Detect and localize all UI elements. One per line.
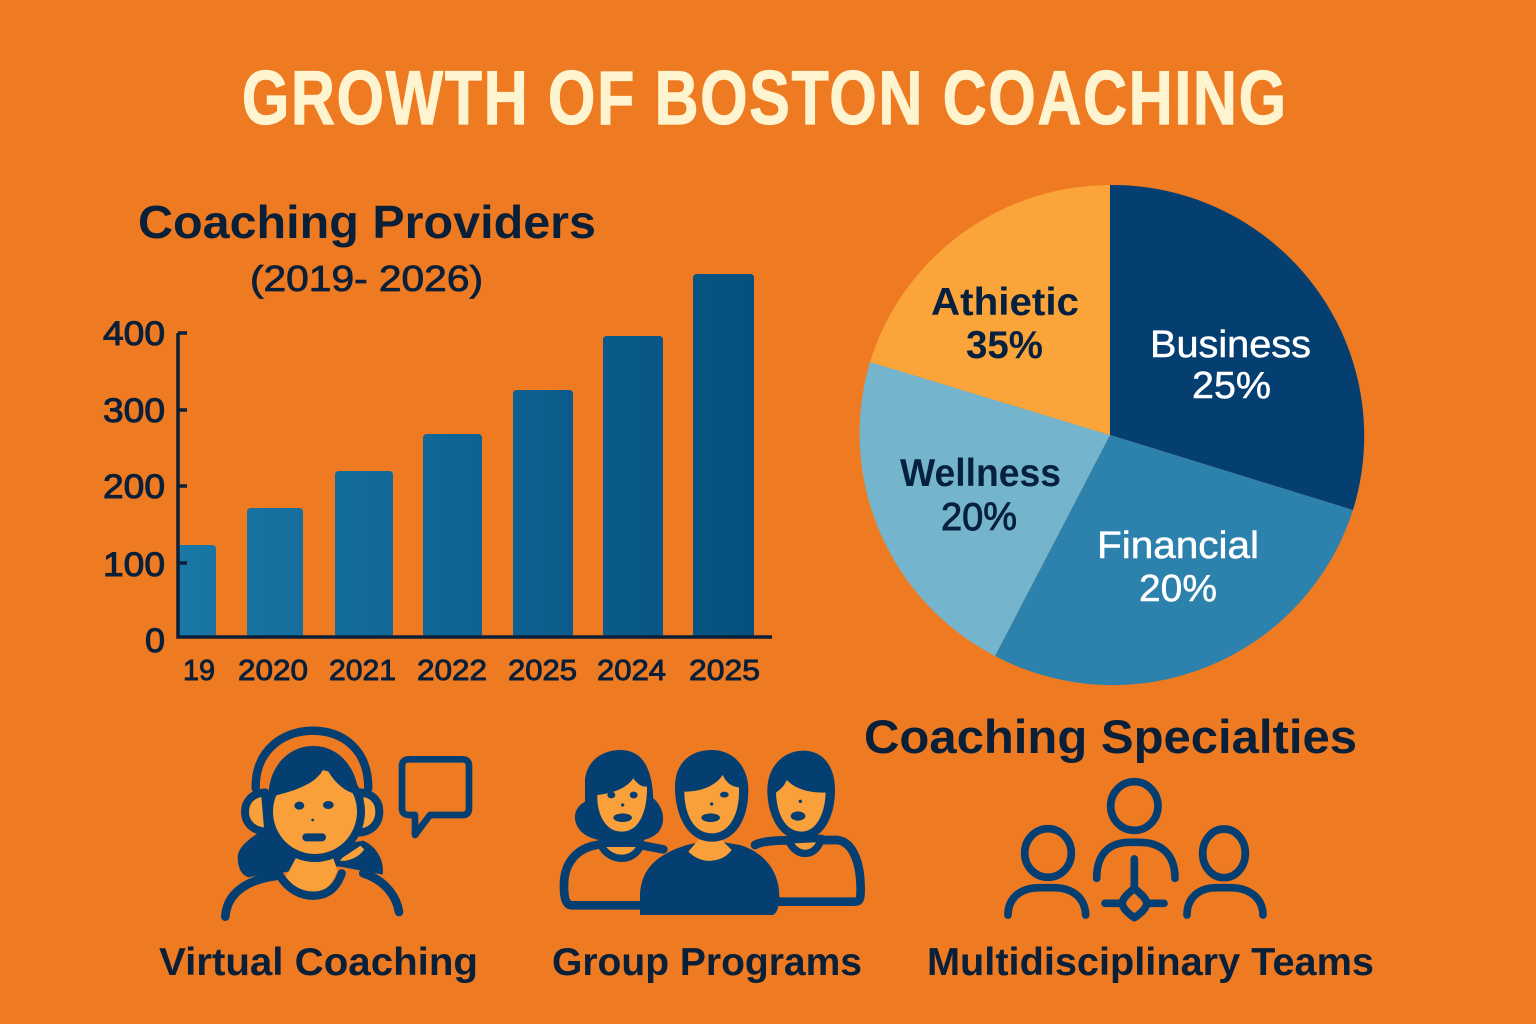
- title: GROWTH OF BOSTON COACHING: [242, 56, 1286, 141]
- caption: multidisciplinary teams: Multidisciplinary Teams: [927, 941, 1374, 984]
- connector diamond: [1105, 859, 1164, 918]
- right person head: [767, 751, 835, 840]
- slice: business: [1110, 185, 1364, 510]
- ear cups: [245, 792, 268, 832]
- panel: pie chart of coaching specialties: [860, 185, 1364, 685]
- y axis labels: 200: [103, 468, 165, 506]
- label: business: 25%: [1192, 365, 1271, 407]
- chart heading: Coaching Providers: [138, 196, 596, 248]
- x axis labels: 2021: [329, 655, 396, 687]
- right person: [1203, 829, 1245, 878]
- center person hair: [675, 750, 748, 842]
- label: financial: Financial: [1097, 525, 1259, 567]
- y axis labels: 0: [145, 622, 165, 660]
- icon: group programs people: [564, 750, 861, 915]
- y axis labels: [103, 315, 165, 660]
- headband: [256, 731, 368, 788]
- label: financial: [1097, 525, 1259, 610]
- x axis labels: 2025: [508, 655, 577, 687]
- collar: [280, 873, 342, 896]
- left person neck: [600, 843, 642, 858]
- label: wellness: [900, 452, 1061, 539]
- x axis labels: 2022: [417, 655, 487, 687]
- caption: virtual coaching: Virtual Coaching: [159, 941, 478, 984]
- neck: [286, 853, 337, 892]
- x axis labels: 19: [183, 655, 215, 687]
- x axis labels: [183, 655, 760, 687]
- left person hair: [575, 750, 663, 842]
- icon: multidisciplinary teams: [1008, 782, 1263, 918]
- left person face: [597, 778, 647, 832]
- y axis labels: 100: [103, 546, 165, 584]
- center person neck: [688, 840, 732, 861]
- center person body: [640, 840, 779, 915]
- icon: virtual coaching headset person: [225, 731, 469, 917]
- label: athletic: [931, 281, 1079, 367]
- slice: wellness: [860, 362, 1110, 656]
- label: financial: 20%: [1139, 568, 1217, 610]
- left person body: [564, 845, 663, 905]
- x axis labels: 2024: [597, 655, 666, 687]
- caption: group programs: Group Programs: [552, 941, 862, 984]
- left person: [1025, 829, 1071, 877]
- center person face: [684, 775, 739, 833]
- right person neck: [788, 838, 822, 853]
- hair top: [268, 746, 359, 797]
- x axis labels: 2025: [689, 655, 760, 687]
- bars: [178, 274, 754, 637]
- right person face: [776, 780, 826, 832]
- hair back: [238, 828, 383, 877]
- microphone arm: [337, 844, 366, 862]
- panel: bar chart of coaching providers: [103, 196, 772, 687]
- label: business: [1150, 324, 1311, 407]
- y axis labels: 400: [103, 315, 165, 353]
- y axis labels: 300: [103, 392, 165, 430]
- right person body: [755, 840, 861, 902]
- label: athletic: Athietic: [931, 281, 1079, 324]
- label: wellness: Wellness: [900, 452, 1061, 495]
- axes: [178, 333, 772, 637]
- eyes, nose and mouth: [294, 801, 334, 841]
- heading: coaching specialties: Coaching Specialties: [864, 710, 1357, 763]
- slice: financial: [995, 435, 1353, 685]
- label: athletic: 35%: [966, 324, 1043, 367]
- shoulders: [225, 873, 399, 917]
- x axis labels: 2020: [238, 655, 308, 687]
- center person: [1111, 782, 1158, 830]
- chart subheading: (2019- 2026): [250, 258, 483, 299]
- face: [269, 765, 361, 858]
- label: business: Business: [1150, 324, 1311, 366]
- speech bubble: [402, 759, 469, 835]
- label: wellness: 20%: [941, 496, 1017, 539]
- slice: athletic: [870, 185, 1110, 435]
- facial features: [607, 792, 805, 822]
